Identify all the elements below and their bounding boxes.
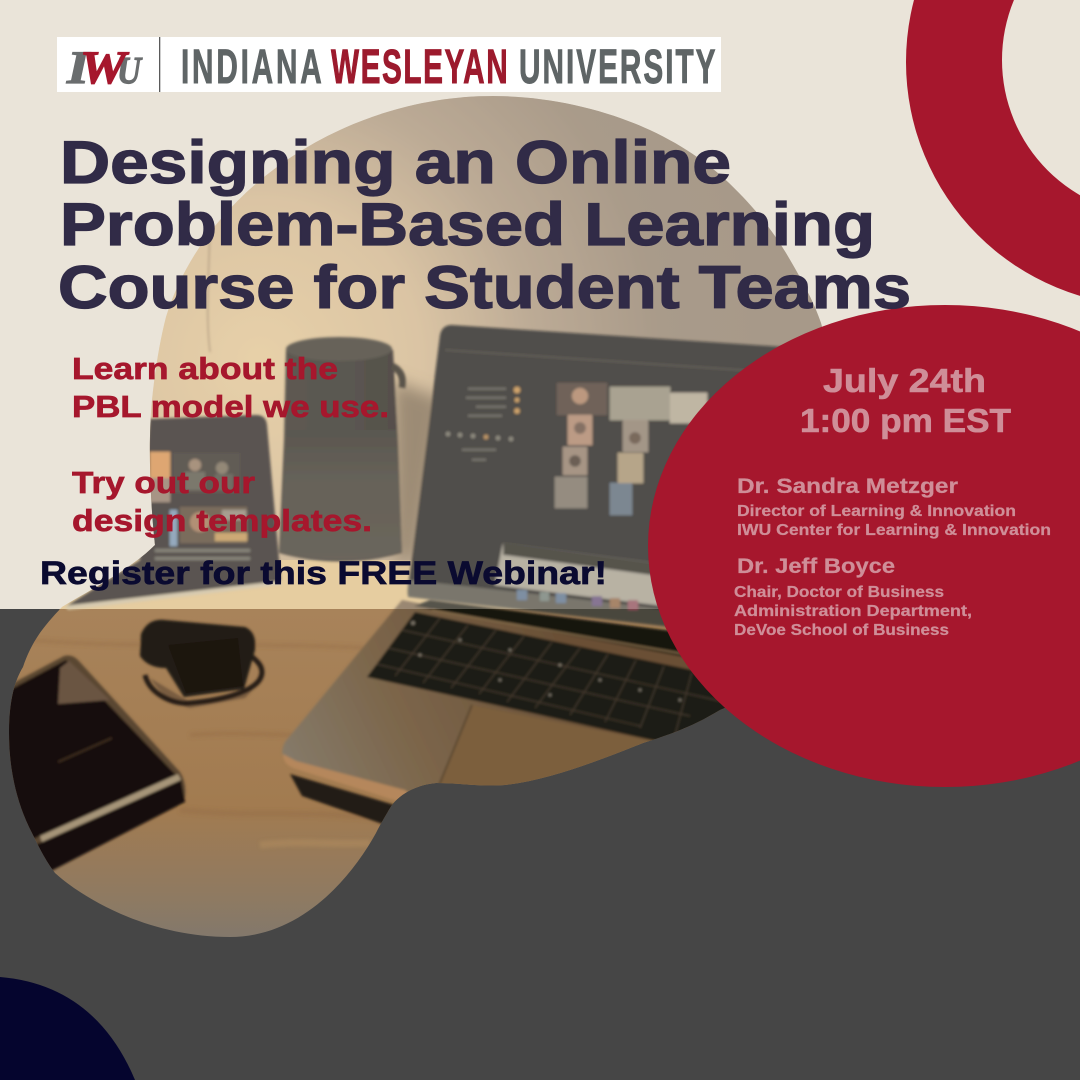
text block: try out design templates: Try out our <box>72 465 255 500</box>
decorative corner: navy bottom left <box>0 977 135 1080</box>
dock icons <box>517 590 638 610</box>
text block: learn about the PBL model: PBL model we use. <box>72 389 389 424</box>
presenter: Dr. Jeff Boyce: Chair, Doctor of Business <box>734 584 944 601</box>
photo wall <box>91 96 822 590</box>
photo table top <box>59 560 524 610</box>
title <box>58 129 911 321</box>
photo cream overlay (upper half) <box>60 96 822 609</box>
logo wordmark <box>181 41 716 94</box>
photo: blob-cropped desk with laptop, speaker, tablet, watch and phone <box>0 90 860 939</box>
presenter: Dr. Jeff Boyce: Administration Department, <box>734 603 972 620</box>
event date and time: July 24th <box>823 362 986 399</box>
text block: try out design templates: design templates. <box>72 503 372 538</box>
speaker shadow <box>390 376 432 569</box>
presenter: Dr. Sandra Metzger: IWU Center for Learning & Innovation <box>737 522 1051 539</box>
red circle panel <box>648 305 1080 787</box>
presenter: Dr. Jeff Boyce: DeVoe School of Business <box>734 622 949 639</box>
laptop bezel <box>415 598 682 658</box>
laptop deck <box>282 599 690 792</box>
text block: learn about the PBL model <box>72 351 389 424</box>
text block: learn about the PBL model: Learn about the <box>72 351 338 386</box>
presenter: Dr. Sandra Metzger <box>737 475 1051 539</box>
decorative ring: top right <box>906 0 1080 306</box>
laptop shadow <box>290 774 398 826</box>
presenter: Dr. Sandra Metzger: Director of Learning & Innovation <box>737 503 1016 520</box>
logo wordmark: UNIVERSITY <box>519 41 716 94</box>
title: Problem-Based Learning <box>60 191 875 258</box>
laptop screen <box>406 323 780 628</box>
logo wordmark: WESLEYAN <box>331 41 508 94</box>
event date and time: 1:00 pm EST <box>800 402 1011 439</box>
zoom participant tiles <box>557 383 607 415</box>
logo mark: IWU: U <box>117 50 143 92</box>
photo cable on wall <box>208 230 210 352</box>
logo mark: IWU <box>66 42 143 94</box>
presenter: Dr. Jeff Boyce <box>734 555 972 639</box>
event date and time <box>800 362 1011 439</box>
logo banner <box>57 37 721 94</box>
logo mark: IWU: I <box>66 42 91 94</box>
lower screen band <box>406 578 666 628</box>
background: charcoal lower area <box>0 609 1080 1080</box>
logo mark: IWU: W <box>80 42 130 94</box>
smartwatch <box>140 620 262 708</box>
photo table lower wood <box>9 609 725 937</box>
laptop front edge <box>283 754 412 802</box>
smartphone <box>9 654 187 872</box>
logo wordmark: INDIANA <box>181 41 322 94</box>
presenter: Dr. Sandra Metzger: Dr. Sandra Metzger <box>737 475 958 498</box>
title: Course for Student Teams <box>58 254 911 321</box>
sidebar <box>514 387 520 414</box>
trackpad <box>438 706 652 786</box>
presenter: Dr. Jeff Boyce: Dr. Jeff Boyce <box>737 555 895 578</box>
control strip <box>500 541 650 576</box>
speaker <box>279 337 403 562</box>
title: Designing an Online <box>60 129 731 196</box>
top toolbar line <box>446 349 743 371</box>
call to action: Register for this FREE Webinar! <box>40 555 607 591</box>
background: cream upper area <box>0 0 1080 609</box>
photo wood grain <box>140 642 370 847</box>
text block: try out design templates <box>72 465 372 538</box>
keyboard <box>367 612 740 742</box>
tablet <box>65 415 282 610</box>
bright window <box>493 542 658 608</box>
